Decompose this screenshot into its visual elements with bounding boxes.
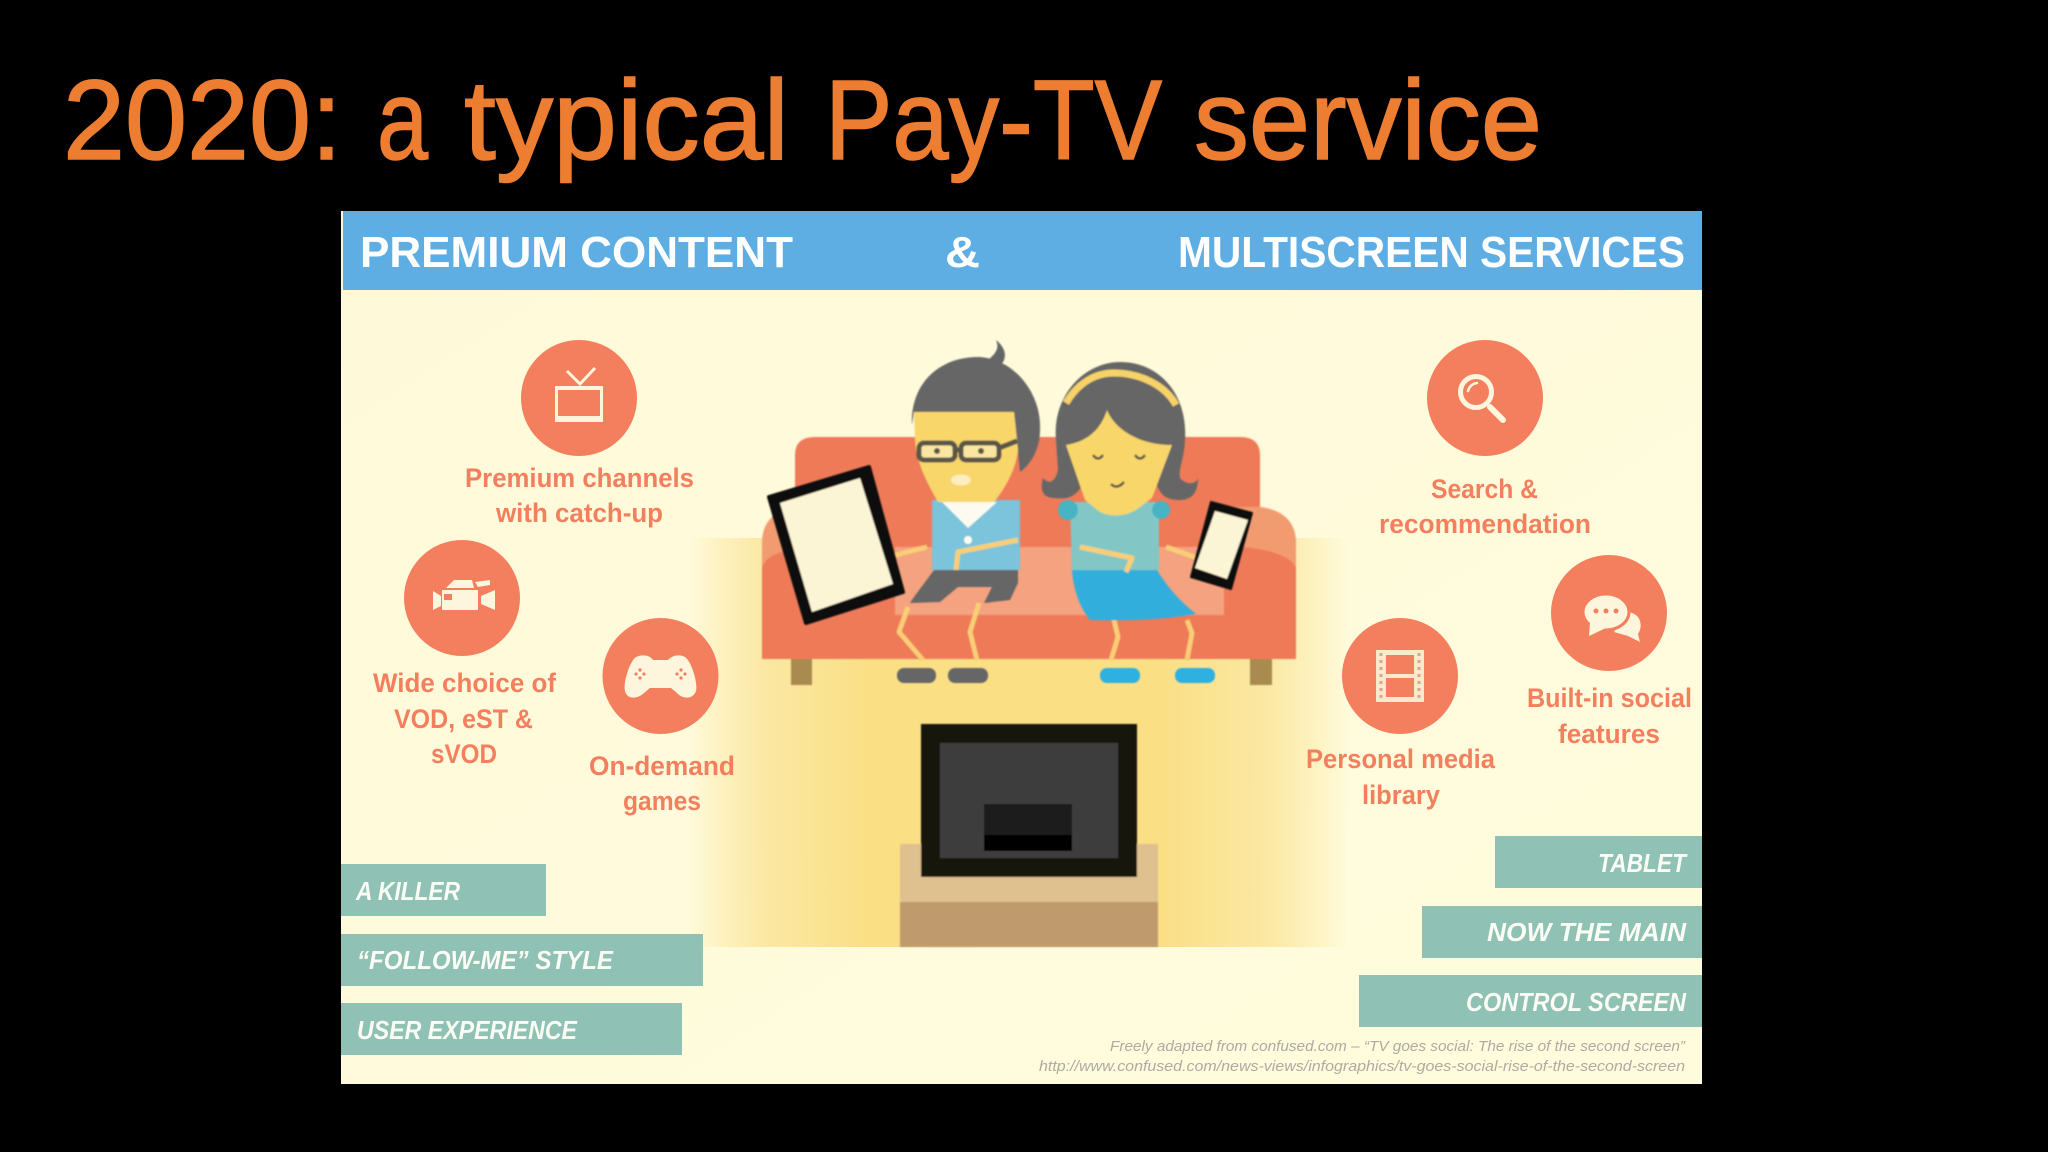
feature: VOD: VOD, eST & — [394, 704, 533, 734]
feature: social: features — [1558, 719, 1660, 749]
smartphone — [1191, 502, 1252, 589]
icon: tv — [555, 368, 603, 422]
header banner: & — [945, 228, 980, 277]
feature: premium channels: Premium channels — [465, 463, 694, 493]
title: service — [1194, 57, 1542, 183]
title — [63, 57, 1542, 183]
header banner — [343, 211, 1702, 290]
feature: search — [1379, 340, 1591, 539]
feature: games: games — [623, 786, 701, 816]
title: typical — [464, 57, 789, 183]
right tags: CONTROL SCREEN — [1466, 987, 1687, 1017]
person: woman — [1042, 362, 1215, 683]
title: Pay-TV — [825, 57, 1162, 183]
person: man — [888, 340, 1040, 683]
feature: search: Search & — [1431, 474, 1538, 504]
feature: games — [589, 618, 735, 816]
feature: VOD — [373, 540, 557, 769]
left tags — [341, 864, 703, 1055]
sofa — [762, 437, 1296, 685]
floor glow background — [689, 538, 1348, 947]
feature: social: Built-in social — [1527, 683, 1692, 713]
feature: search: recommendation — [1379, 509, 1591, 539]
header banner: MULTISCREEN SERVICES — [1178, 228, 1685, 277]
feature: personal media: Personal media — [1306, 744, 1496, 774]
icon: film strip — [1376, 650, 1424, 702]
tablet — [769, 467, 903, 623]
title: a — [377, 57, 428, 183]
feature: games: On-demand — [589, 751, 735, 781]
source credit: http://www.confused.com/news-views/infographics/tv-goes-social-rise-of-the-second-screen — [1039, 1058, 1685, 1075]
right tags — [1359, 836, 1702, 1027]
title: 2020: — [63, 57, 342, 183]
source credit — [1039, 1038, 1686, 1075]
feature: VOD: Wide choice of — [373, 668, 557, 698]
feature: VOD: sVOD — [431, 739, 497, 769]
icon: video camera — [433, 580, 495, 610]
right tags: NOW THE MAIN — [1487, 917, 1687, 947]
feature: premium channels — [465, 340, 694, 528]
television on stand — [900, 724, 1158, 947]
feature: personal media: library — [1362, 780, 1440, 810]
source credit: Freely adapted from confused.com – “TV goes social: The rise of the second screen” — [1110, 1038, 1686, 1055]
left tags: USER EXPERIENCE — [357, 1015, 578, 1045]
feature: personal media — [1306, 618, 1496, 810]
panel: infographic — [341, 211, 1702, 1084]
icon: gamepad — [625, 655, 696, 698]
left tags: “FOLLOW-ME” STYLE — [357, 945, 614, 975]
header banner: PREMIUM CONTENT — [360, 228, 793, 277]
icon: speech bubbles — [1583, 594, 1641, 642]
feature: social — [1527, 555, 1692, 749]
left tags: A KILLER — [355, 876, 460, 906]
icon: magnifier — [1460, 376, 1503, 420]
right tags: TABLET — [1598, 848, 1688, 878]
feature: premium channels: with catch-up — [495, 498, 663, 528]
